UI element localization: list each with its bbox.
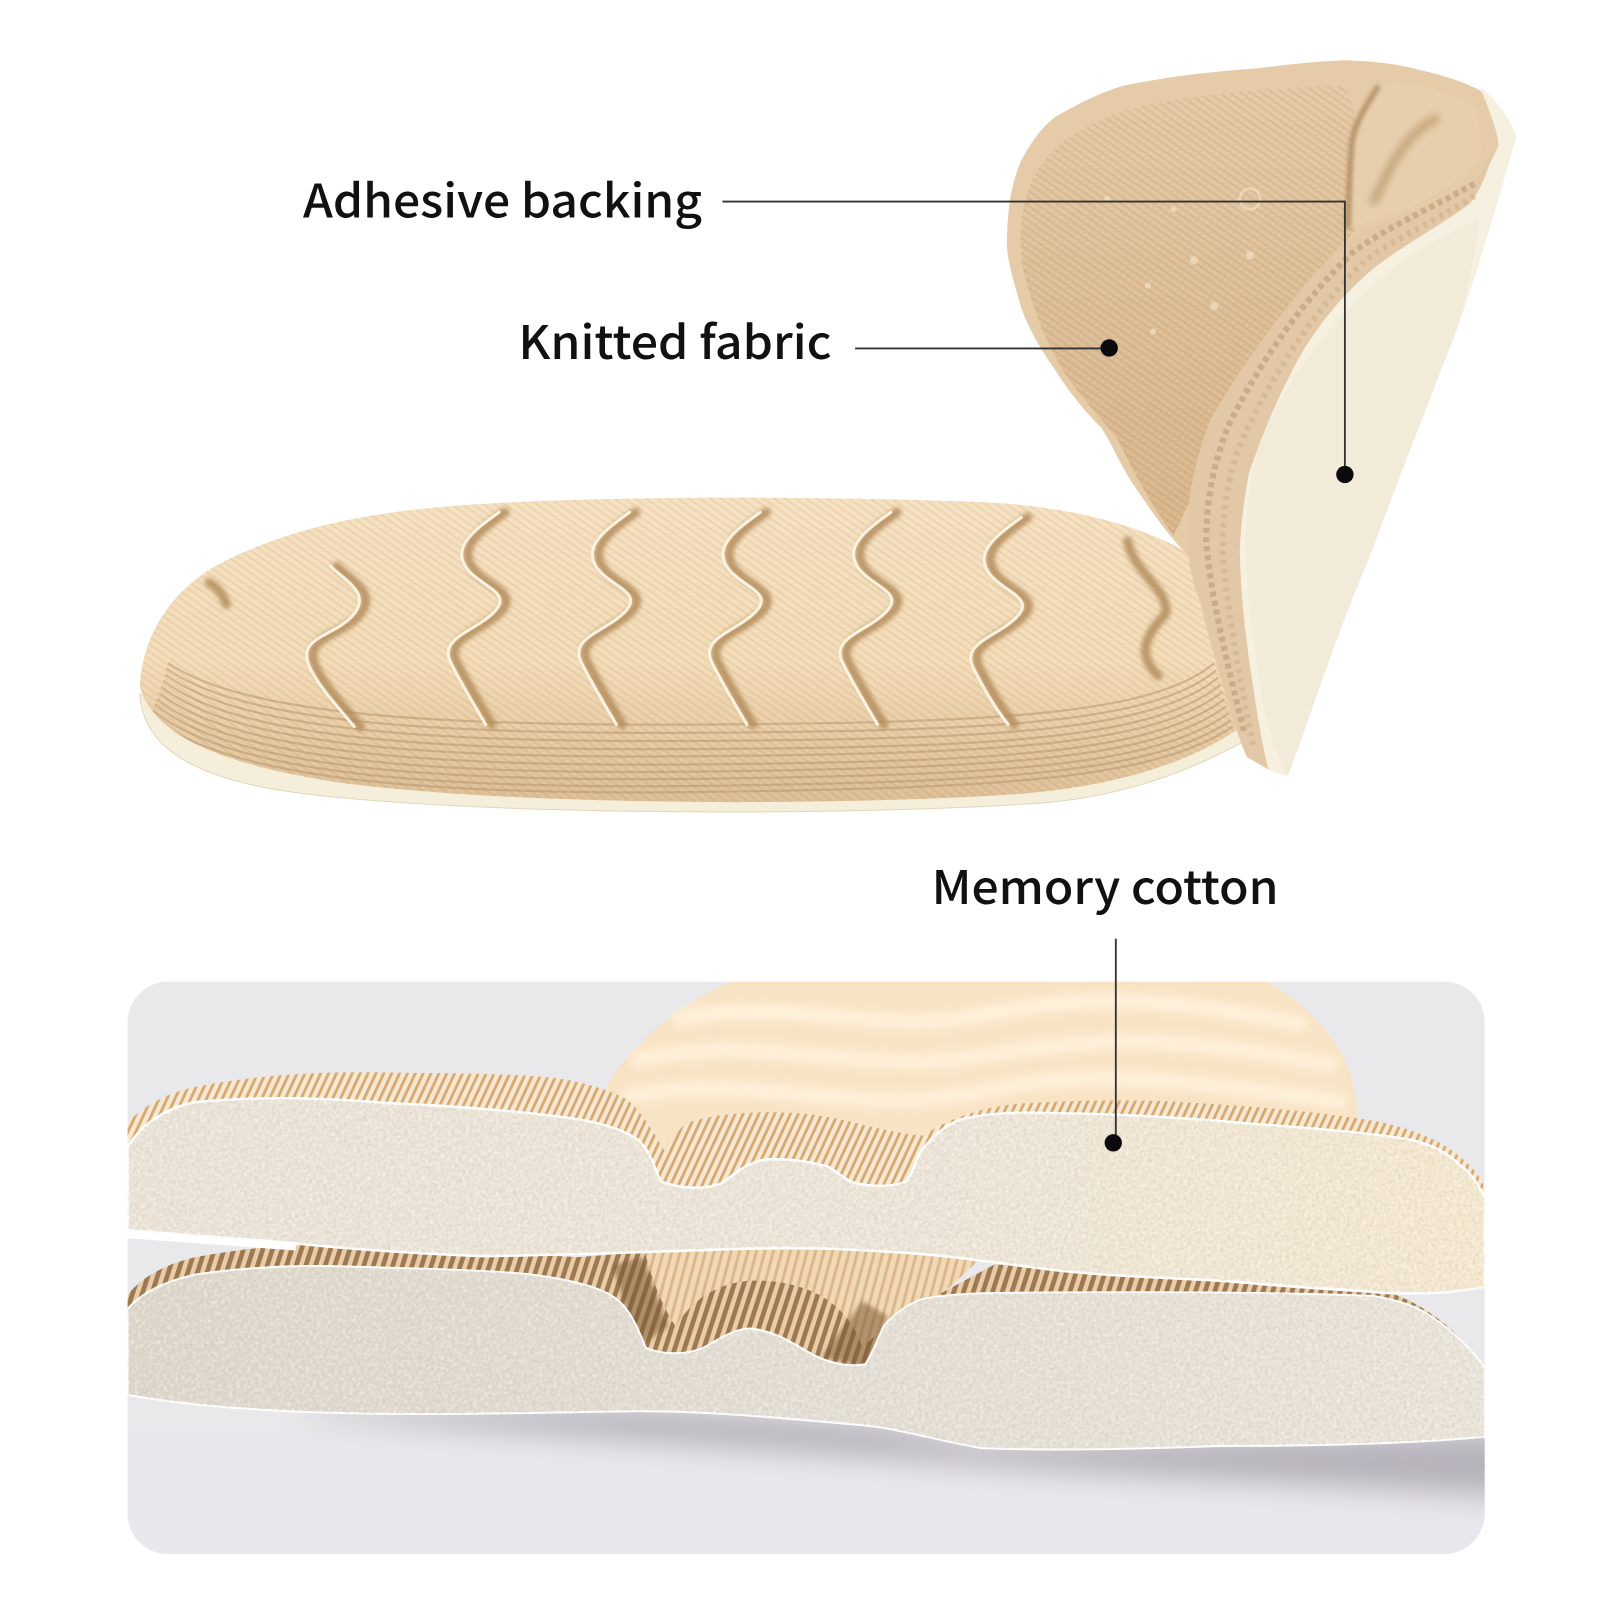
upper slice foam	[128, 1098, 1485, 1293]
adhesive backing cream layer	[1189, 87, 1516, 777]
leader line: Knitted fabric	[855, 347, 1109, 349]
insole wave grooves	[209, 512, 1166, 727]
upper slice	[128, 1072, 1485, 1301]
lower slice	[128, 1245, 1485, 1454]
lower slice foam	[128, 1266, 1485, 1449]
callout: Memory cotton	[932, 851, 1279, 1152]
panel: foam cross-section	[128, 982, 1551, 1554]
upper slice fabric skin	[128, 1072, 1485, 1230]
white gap between slices	[128, 1235, 296, 1247]
heel wing knitted fabric	[1005, 60, 1516, 571]
dot: Knitted fabric	[1101, 339, 1118, 357]
blurred insole behind the slices	[607, 982, 1357, 1152]
insole ribbed stripes	[151, 663, 1233, 792]
heel flap knit band	[1187, 153, 1492, 769]
insole fabric body	[133, 496, 1255, 802]
wing perforation marks	[1104, 189, 1260, 335]
shadow beneath slices	[306, 1408, 1551, 1500]
dot: Adhesive backing	[1336, 466, 1354, 483]
folded second pad	[1348, 84, 1481, 229]
callout: Adhesive backing	[303, 164, 1354, 483]
label: Memory cotton: Memory cotton	[932, 851, 1279, 918]
insole cream base layer	[140, 694, 1265, 812]
leader line: Adhesive backing	[722, 202, 1345, 474]
lower slice fabric skin	[128, 1245, 1485, 1378]
dot: Memory cotton	[1105, 1134, 1122, 1152]
label: Adhesive backing: Adhesive backing	[303, 164, 702, 231]
panel background	[128, 982, 1484, 1428]
leader line: Memory cotton	[1115, 939, 1117, 1143]
lower slice back peach fabric	[643, 1250, 990, 1347]
callout: Knitted fabric	[518, 306, 1118, 373]
panel: insole product photo	[133, 60, 1516, 812]
label: Knitted fabric: Knitted fabric	[518, 306, 832, 373]
